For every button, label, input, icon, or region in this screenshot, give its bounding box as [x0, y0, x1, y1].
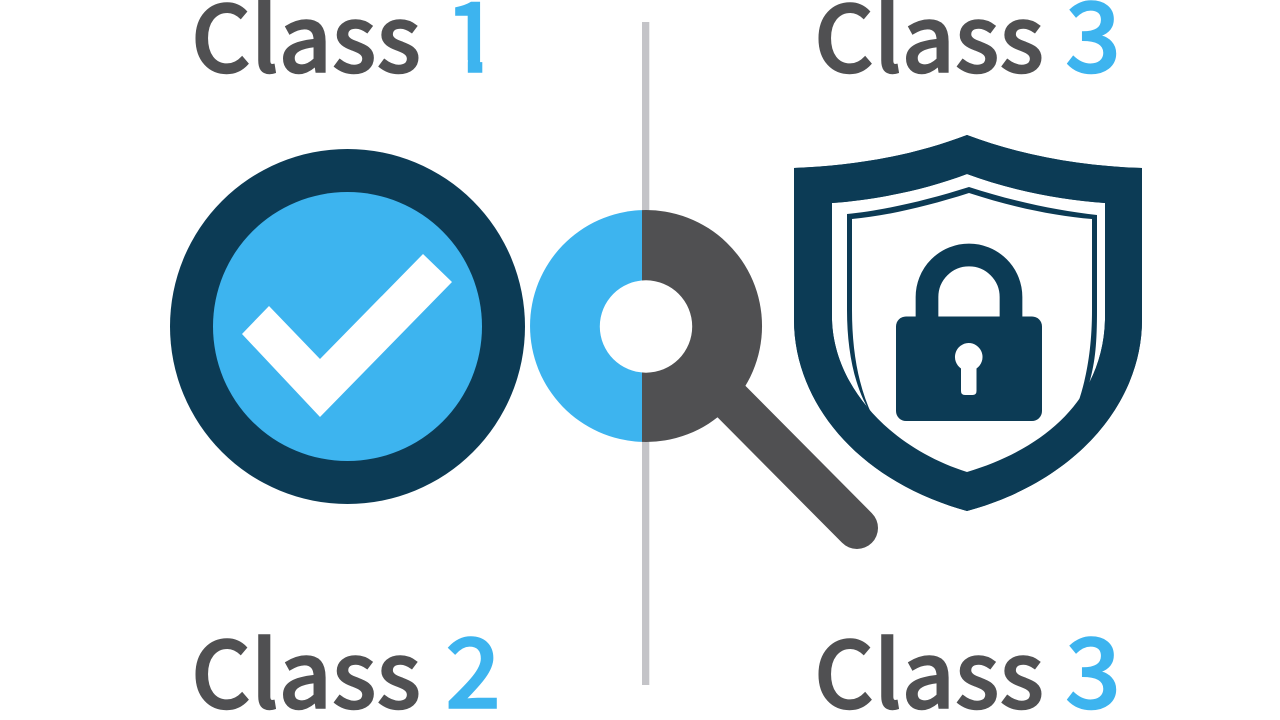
center divider line: [642, 22, 649, 685]
icon: security shield with padlock: [794, 135, 1142, 511]
icon: check mark badge: [170, 149, 525, 504]
heading: Class 2: [191, 595, 501, 720]
icon: magnifying glass: [530, 210, 857, 528]
padlock: [896, 255, 1042, 421]
